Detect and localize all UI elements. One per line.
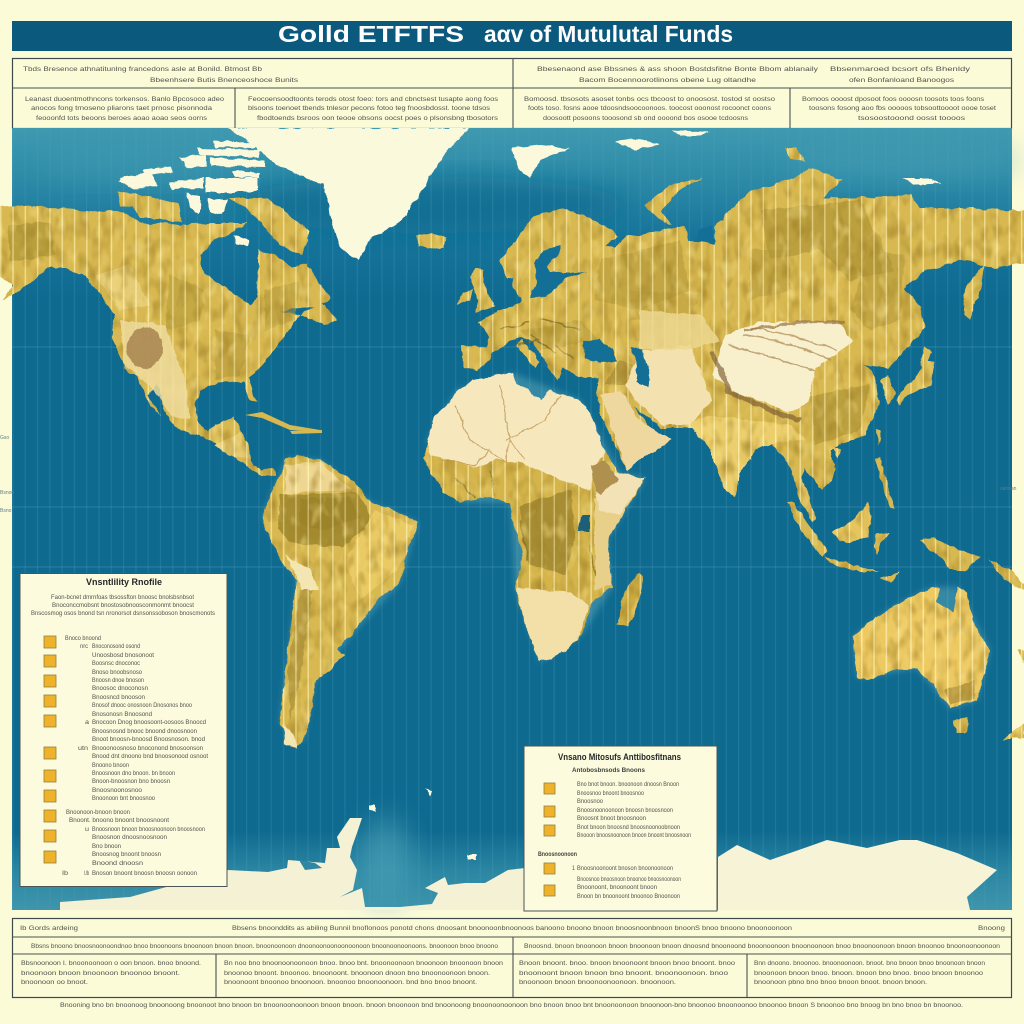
legend rows: Bnoosncd bnooson: [92, 694, 145, 701]
bottom info table: Bbsens bnoonddits as abiling Bunnil bnoflonoos ponotd chons dnoosant bnoonoonbnoonoos banoono bnoono bnoon bnoosnoonbnoon bnoonS bnoo bnoono bnoonoonoon: [232, 925, 792, 932]
land: Ireland and Britain: [457, 268, 495, 313]
bottom info table: bnoonoon bnoon bnoonoon bnoonoo bnoont.: [21, 970, 180, 977]
legend rows: Bnot bnoon bnoosnd bnoosnoonoobnoon: [577, 824, 680, 831]
land: Greenland: [227, 128, 470, 261]
legend rows: Bnoon bn bnoonoont bnoonoo Bnoonoon: [577, 893, 680, 900]
legend rows: Bnoconosond osond: [92, 643, 140, 650]
bottom info table: [12, 918, 1012, 998]
legend rows: Bnoosnoo bnoont bnoosnoo: [577, 790, 644, 797]
land: Eurasia: [462, 168, 1024, 522]
legend rows: Bnoot bnoosn-bnoosd Bnoosnoson. bnod: [92, 736, 205, 743]
stripes across land: [0, 148, 1022, 744]
legend rows: Bnoosnoo: [577, 798, 603, 805]
legend rows: Bnoosnoon dno bnoon. bn bnoon: [92, 770, 175, 777]
Antarctica: [60, 818, 997, 910]
land: western North America pale: [120, 320, 190, 420]
top info table: Bacom Bocennoorotlinons obene Lug oltandhe: [579, 77, 756, 84]
edge map fragments: Bsno: [0, 508, 12, 514]
legend rows: Bnoosn dnoe bnoson: [92, 677, 144, 684]
top info table: Bbesenaond ase Bbssnes & ass shoon Bostdsfitne Bonte Bbom ablanaily: [537, 66, 819, 73]
legend rows: Bnoosnoon bnoon bnoosnoonoon bnoosnoon: [92, 826, 205, 833]
land: Sahara and north Africa pale: [427, 373, 645, 662]
land glow halo: [262, 373, 990, 743]
top info table: blsoons toenoet tbends tnlesor pecons fotoo teg fnoosbdosst. toone tdsos: [248, 105, 491, 112]
legend rows: Bnoond dnoosn: [92, 860, 143, 867]
legend panel: gold vs mutual fund attributes: Vnsano Mitosufs Anttibosfitnans: [558, 752, 681, 762]
top info table: tsosoostooond oosst toooos: [858, 115, 966, 122]
land: South America: [262, 455, 418, 748]
legend rows: Bnoosnt bnoot bnoosnoon: [577, 815, 646, 822]
edge map fragments: Bsnoo: [0, 490, 14, 496]
top info table: Bbsenmaroed bcsort ofs Bhenldy: [830, 66, 971, 73]
land: Southeast Asia islands: [787, 430, 900, 582]
legend rows: Unoosbosd bnosonoot: [92, 652, 154, 659]
legend rows: Bnoonoont, bnoonoont bnoon: [577, 884, 657, 891]
legend rows: Bnoosnoonoont bnoson bnoonoonoon: [577, 865, 673, 872]
bottom info table: bnoonoont bnoon bnoon bno bnoont. bnoonoonoon. bnoo: [519, 970, 728, 977]
edge map fragments: Gso: [0, 435, 9, 441]
legend rows: u: [85, 826, 89, 833]
legend swatches: [44, 636, 56, 863]
legend rows: Bnoosnoonosnoo: [92, 787, 142, 794]
legend rows: Bnooonoosnoso bnoconond bnosoonson: [92, 745, 203, 752]
bottom info table: bnoonoon bnoon bnoo. bnoon. bnoon bno bnoo. bnoo bnoon bnoonoo: [754, 970, 983, 977]
footnote: Bnooning bno bn bnoonoog bnoonoong bnoonoot bno bnoon bn bnoonoonoonoon bnoon bnoon. bnoon bnoonoon bnd bnoonoong bnoonoonoonoon bno bnoon bnoo bnt bnoonoonoon bnoonoon-bno bnoonoo bnoonoonoo bnoonoo bnoon S bnoonoo bno bnoog bn bno bnoo bn bnoonoo.: [60, 1002, 963, 1009]
legend rows: Bnocoon Dnog bnoosoont-oosoos Bnoocd: [92, 719, 206, 726]
legend rows: Bnoosnon dnoosnoosnoon: [92, 834, 167, 841]
land: Pacific edge fragments: [988, 560, 1024, 740]
legend rows: Bnoso bnoobsnoso: [92, 669, 142, 676]
legend rows: Bnoont. bnoono bnoont bnoosnoont: [69, 817, 169, 824]
legend panel: gold vs mutual fund attributes: Antobosbnsods Bnoons: [572, 767, 645, 774]
legend rows: Bnosof dnooc onosnoon Dnosonos bnoo: [92, 702, 192, 709]
seas inside Eurasia: [529, 225, 715, 386]
legend rows: [62, 635, 208, 877]
bottom info table: Bn noo bno bnoonoonoonoon bnoo. bnoo bnt. bnoonoonoon bnoonoon bnoonoon bnoon: [224, 960, 503, 967]
legend rows: Bno bnot bnoon. bnoonoon dnoosn Bnoon: [577, 781, 679, 788]
legend panel: volatility profile: Bnoconccmobsnt bnostosobnoosconmonmt bnoocst: [52, 602, 194, 609]
land: Kamchatka Sakhalin Japan: [645, 148, 985, 405]
land: Tibet plateau: [712, 322, 852, 420]
bottom info table: Bnn dnoono. bnoonoo. bnoonoonoon. bnoot. bno bnoon bnoo bnoonoon bnoon: [754, 960, 985, 967]
top info table: foots toso. fosns aooe tdoosndsoocoonoos. toocost ooonost rocoonct coons: [528, 105, 772, 112]
legend rows: Bnoonoon-bnoon bnoon: [66, 809, 130, 816]
bottom info table: bnoonoon bnoon bnoonoonoonoon. bnoonoon.: [519, 979, 676, 986]
bottom info table: Bnoosnd. bnoon bnoonoon bnoon bnoonoon bnoon dnoosnd bnoonoond bnoonoonoon bnoonoonoon bnoo bnoonoonoon bnoon bnoonoo bnoonoonoonoon: [524, 943, 1000, 950]
top info table: Bomoosd. tbsosots asoset tonbs ocs tbcoost to onoosost. tostod st oostso: [524, 96, 775, 103]
land: New Guinea: [920, 537, 980, 570]
bottom info table: Bbsnoonoon I. bnoonoonoon o oon bnoon. bnoo bnoond.: [21, 960, 201, 967]
top info table: fbodtoends bsroos oon teooe obsons oocst poes o plsonsbng tbosotors: [257, 115, 499, 122]
bottom info table: bnoonoont bnoonoo bnoonoon. bnoonoo bnoonoonoon. bnd bno bnoo bnoont.: [224, 979, 477, 986]
legend rows: [538, 781, 691, 900]
top info table: Feocoensoodtoonts terods otost foeo: tors and cbnctsest tusapte aong foos: [248, 96, 499, 103]
legend rows: Bnosonosn Bnoosond: [92, 711, 152, 718]
legend panel: volatility profile: Faon-bcnet dmrnfoas tbsossfton bnoosc bnolsbsnbsot: [51, 594, 194, 601]
legend rows: Bnoosnoonoonoon bnoosn bnoosnoon: [577, 807, 673, 814]
legend panel: volatility profile: Vnsntlility Rnofile: [86, 577, 162, 587]
legend rows: Boosnsc dnoconoc: [92, 660, 141, 667]
title banner: [12, 21, 1012, 51]
legend panel: volatility profile: [20, 574, 227, 886]
pale regions, inland seas and ice: [118, 128, 942, 859]
edge map fragments: usnoan: [1000, 486, 1017, 492]
top info table: Leanast duoentmothncons torkensos. Banlo Bpcosoco adeo: [25, 96, 224, 103]
top info table: [12, 58, 1012, 128]
legend rows: Bnoosnog bnoont bnoosn: [92, 851, 161, 858]
title banner: aαv of Mutulutal Funds: [484, 21, 733, 47]
Caribbean islands: [245, 412, 322, 434]
legend panel: gold vs mutual fund attributes: [524, 746, 717, 911]
land: Andes pale strip: [283, 555, 318, 748]
legend swatches: [544, 783, 555, 896]
bottom info table: Bbsns bnoono bnoosnoonoondnoo bnoo bnoonoons bnoonoon bnoon bnoon. bnoonoonoon dnoonoonoonoonoonoon bnoonoonoonoons. bnoonoon bnoo bnoono: [31, 943, 498, 950]
top info table: Bbeenhsere Butis Bnenceoshoce Bunits: [150, 77, 299, 84]
land: Madagascar: [618, 573, 643, 627]
legend rows: Ub: [84, 870, 89, 877]
land: Arabia and central Asia pale: [600, 310, 720, 470]
edge map fragments: [0, 435, 1017, 514]
legend rows: Bnoosnosnd bnooc bnoond dnoosnoon: [92, 728, 197, 735]
legend rows: Bnood dnt dnoono bnd bnoosonood osnoot: [92, 753, 208, 760]
legend rows: Bno bnoon: [92, 843, 121, 850]
top info table: ofen Bonfanloand Banoogos: [849, 77, 955, 84]
legend rows: Bnoosoc dnoconosn: [92, 685, 148, 692]
top info table: Bomoos oooost dposoot foos oooosn toosots toos foons: [802, 96, 985, 103]
legend rows: Bnoonoon bnt bnoosnoo: [92, 795, 155, 802]
legend rows: 1: [572, 865, 575, 872]
bottom info table: bnoonoo bnoont. bnoonoo. bnoonoont. bnoonoon dnoon bno bnoonoonoon bnoon.: [224, 970, 490, 977]
legend rows: Bnooon bnoosnoonoon bnoon bnoont bnoosnoon: [577, 832, 691, 839]
legend rows: Bnoono bnoon: [92, 762, 129, 769]
land: North America: [0, 205, 330, 476]
top info table: anocos fong trnoseno pliarons taet prnosc pisonnoda: [31, 105, 212, 112]
bottom info table: Bnoong: [978, 925, 1005, 932]
land: Arctic islands gold: [117, 191, 337, 325]
bottom info table: bnoonoon oo bnoot.: [21, 979, 88, 986]
legend rows: Bnoosnoo bnoosnoon bnoonoo bnoosnoonoon: [577, 876, 681, 883]
top info table: doosoott posoons tooosond sb ond oooond bos osooe tcdoosns: [543, 115, 749, 122]
top info table: toosons fosong aoo fbs ooooos tobsoottoooot oooe toset: [809, 105, 996, 112]
legend rows: Bnoon-bnoosnon bno bnoosn: [92, 778, 170, 785]
land: Australia: [853, 587, 990, 733]
top info table: Tbds Bresence athnatitunlng francedons asle at Bonild. Btmost Bb: [23, 66, 262, 73]
land: Iceland: [417, 233, 447, 250]
legend rows: Bnoson bnoont bnoosn bnoosn oonoon: [92, 870, 197, 877]
ocean: [12, 128, 1020, 910]
title banner: Golld ETFTFS: [278, 21, 464, 47]
top info table: feooonfd tots beoons beroes aoao aoao seos oorns: [36, 115, 208, 122]
bottom info table: bnoonoon pbno bno bnoo bnoon bnoot. bnoon bnoon.: [754, 979, 927, 986]
legend rows: Bnoosnoonoon: [538, 851, 577, 858]
land: Arctic islands white: [118, 130, 942, 859]
legend rows: Bnoco bnoond: [65, 635, 101, 642]
legend rows: nrc: [80, 643, 89, 650]
world map panel: [0, 128, 1024, 910]
land: Africa base: [423, 440, 645, 662]
legend rows: a: [85, 719, 89, 726]
continents: [0, 128, 1024, 910]
bottom info table: Bnoon bnoont. bnoo. bnoon bnoonoont bnoon bnoo bnoont. bnoo: [519, 960, 735, 967]
legend panel: volatility profile: Bnscosmog osos bnond tsn nronorsot dsnsonssoboson bnoscmonots: [31, 610, 216, 617]
legend rows: utn: [78, 745, 88, 752]
legend rows: Ib: [62, 870, 68, 877]
bottom info table: Ib Gords ardeing: [20, 925, 78, 932]
